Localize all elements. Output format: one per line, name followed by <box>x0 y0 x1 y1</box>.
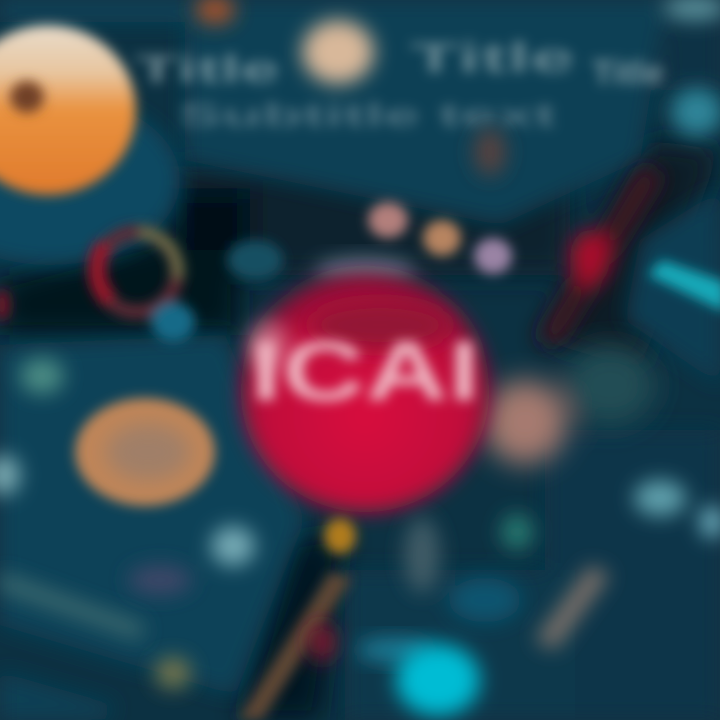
heading <box>135 34 664 133</box>
icon: red accent band <box>535 165 665 345</box>
icon: three dots <box>368 202 512 274</box>
icon: tan medallion <box>75 398 215 506</box>
icon: small dots on card <box>0 358 255 689</box>
panel: right side <box>345 190 720 720</box>
heading: Subtitle text <box>178 97 557 133</box>
icon: cyan bar <box>648 260 720 312</box>
icon: small ring gauge <box>0 232 283 342</box>
icon: lower accents <box>308 480 720 662</box>
ball label: ICAI <box>250 324 480 418</box>
heading: Title <box>410 34 575 81</box>
red ball with label <box>241 258 489 512</box>
icon: top accents <box>195 0 720 176</box>
heading: Title <box>592 54 664 92</box>
icon: orange disc <box>0 25 180 265</box>
panel: top header <box>0 0 720 225</box>
panel: pink callout <box>483 345 655 464</box>
heading: Title <box>135 49 280 91</box>
icon: diagonal capsule <box>535 565 610 650</box>
text block: card caption <box>0 572 145 640</box>
icon: cyan glow <box>357 638 480 716</box>
panel: bottom left card <box>0 335 305 720</box>
icon: ball pin <box>238 518 356 720</box>
